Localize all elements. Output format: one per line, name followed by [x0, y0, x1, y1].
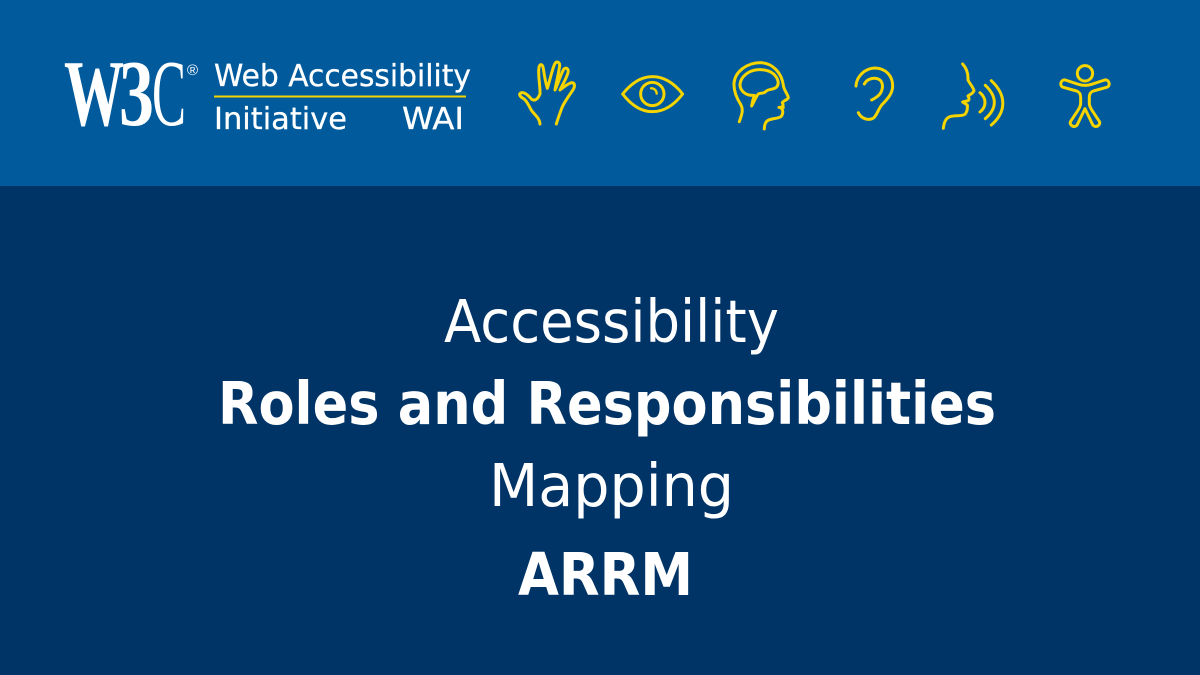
title line: Accessibility: Accessibility [444, 287, 779, 356]
WAI wordmark: Web Accessibility [214, 59, 471, 94]
title line: ARRM: ARRM [518, 540, 693, 609]
W3C logo: W [64, 42, 124, 146]
title line: Mapping: Mapping [489, 451, 734, 520]
W3C logo: ® [187, 62, 198, 79]
icon: accessibility person [1061, 66, 1109, 126]
WAI wordmark: WAI [402, 102, 464, 137]
W3C logo: C [152, 42, 186, 146]
W3C logo: 3 [119, 42, 154, 146]
icon: hand [520, 62, 574, 124]
title [218, 287, 996, 609]
icon: head with brain [734, 63, 788, 129]
title line: Roles and Responsibilities: Roles and Responsibilities [218, 369, 996, 438]
WAI wordmark [214, 59, 471, 137]
header band [0, 0, 1200, 186]
icon: speaking face [943, 64, 1003, 128]
icon: ear [856, 68, 893, 119]
icon: eye [623, 77, 683, 112]
WAI wordmark: Initiative [214, 102, 347, 137]
